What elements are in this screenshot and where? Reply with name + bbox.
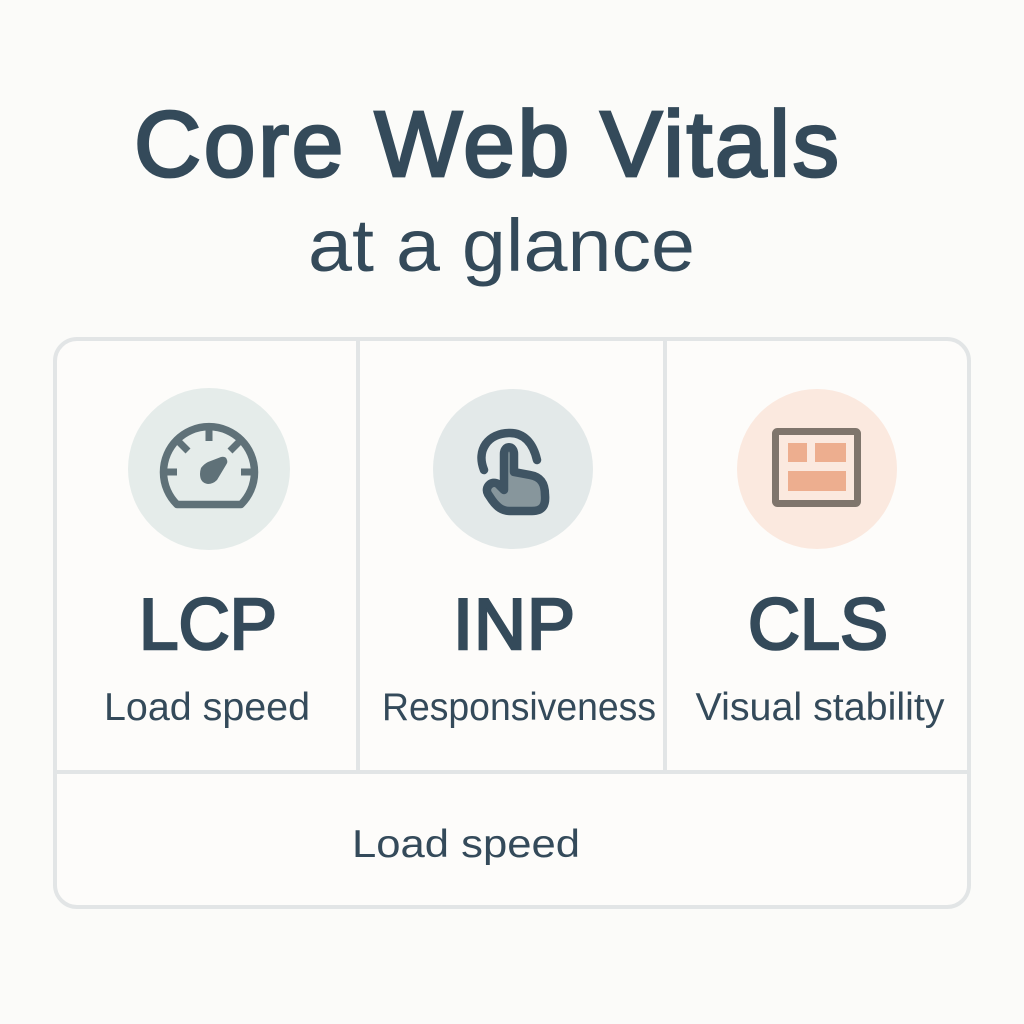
icon: tapping hand [433, 389, 593, 549]
subtitle: at a glance [308, 204, 695, 287]
label: LCP: LCP [139, 585, 277, 665]
label: CLS: CLS [748, 585, 888, 665]
title: Core Web Vitals [134, 92, 839, 196]
icon: speedometer [128, 388, 290, 550]
footer text: Load speed [352, 823, 580, 866]
panel: INP [382, 389, 656, 729]
panel: CLS [696, 389, 945, 729]
title [134, 92, 839, 287]
description: Load speed: Load speed [104, 686, 310, 729]
label: INP: INP [453, 585, 575, 665]
icon: page layout [737, 389, 897, 549]
panel: LCP [104, 388, 310, 729]
panel: metrics table [55, 339, 969, 907]
description: Responsiveness: Responsiveness [382, 686, 656, 729]
description: Visual stability: Visual stability [696, 686, 945, 729]
